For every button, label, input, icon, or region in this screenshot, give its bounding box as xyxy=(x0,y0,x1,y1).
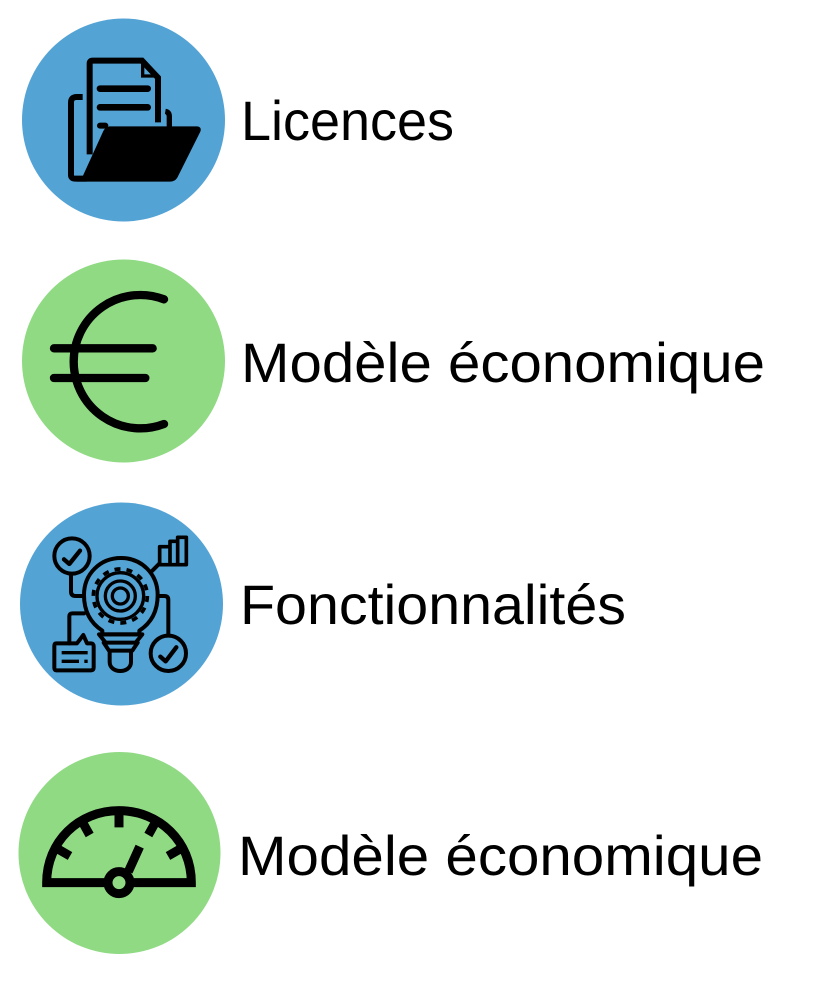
label: Fonctionnalités: Fonctionnalités xyxy=(240,573,626,636)
icon: euro sign xyxy=(54,295,164,428)
icon: speedometer xyxy=(47,811,191,894)
circle: blue background xyxy=(20,502,223,706)
circle: blue background xyxy=(22,18,225,222)
row: Modèle économique (gauge) xyxy=(18,752,763,954)
icon: folder with document xyxy=(71,61,201,182)
circle: green background xyxy=(18,752,220,954)
row: Fonctionnalités xyxy=(20,502,626,706)
row: Modèle économique (euro) xyxy=(22,260,765,462)
label: Licences: Licences xyxy=(241,89,454,152)
icon: light bulb with gear xyxy=(54,537,186,671)
label: Modèle économique: Modèle économique xyxy=(241,331,765,394)
row: Licences xyxy=(22,18,454,222)
circle: green background xyxy=(22,260,225,462)
label: Modèle économique: Modèle économique xyxy=(238,824,763,887)
